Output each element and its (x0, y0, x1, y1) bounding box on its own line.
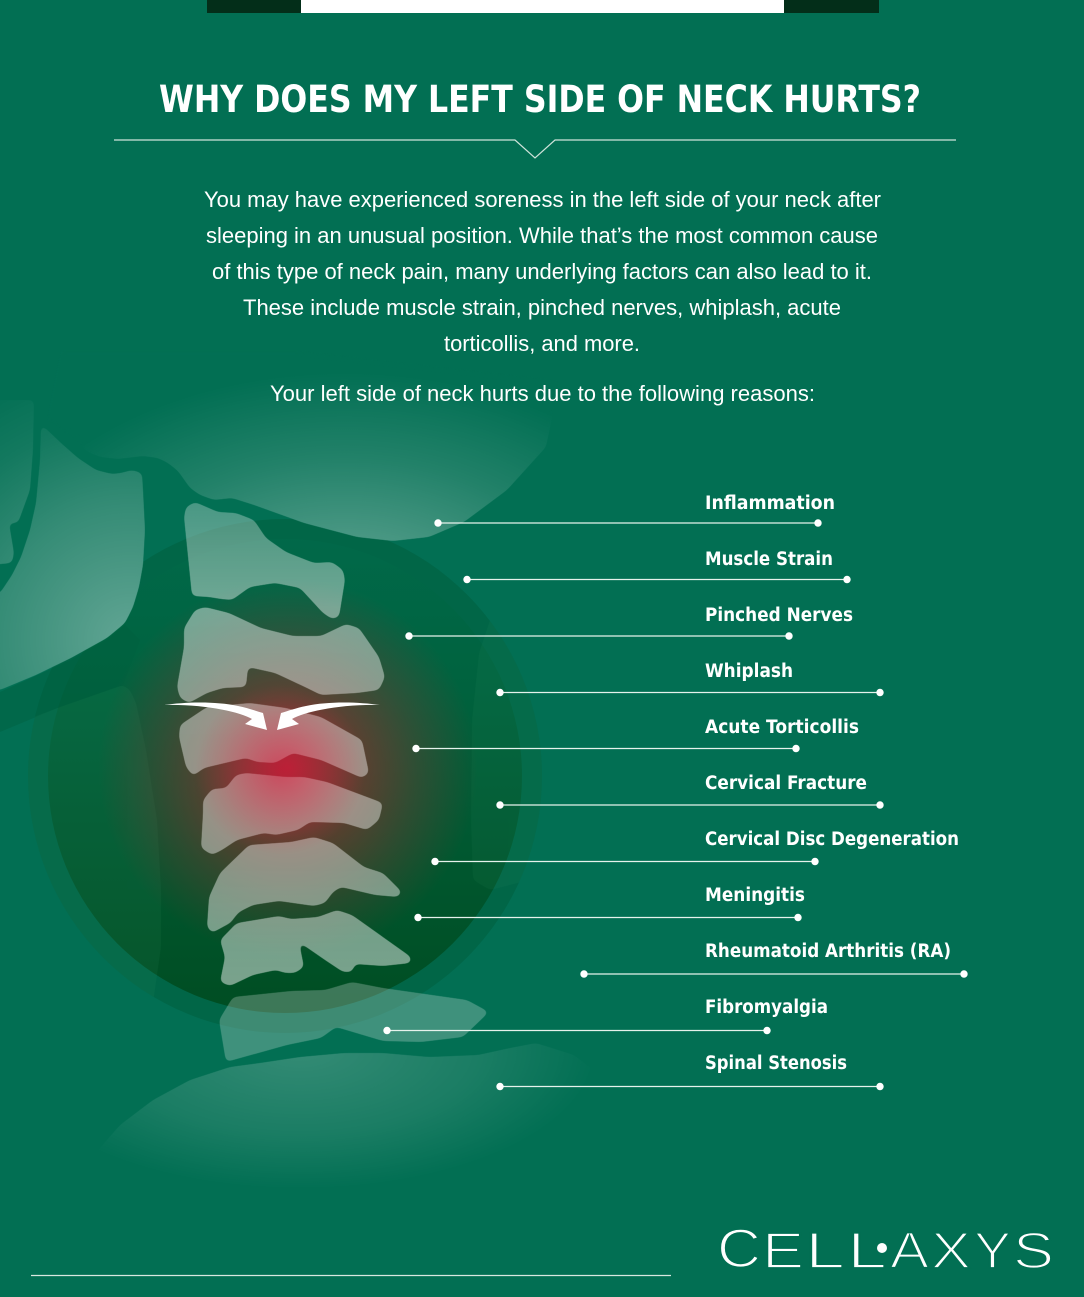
item: Spinal Stenosis: Spinal Stenosis (705, 1053, 847, 1074)
right neck muscle (471, 537, 560, 890)
vertebra C2 (177, 607, 385, 703)
right pain arrow (277, 702, 380, 730)
logo: CellAxys: S (1013, 1222, 1054, 1279)
item: Fibromyalgia: Fibromyalgia (705, 997, 828, 1018)
item: Cervical Disc Degeneration: Cervical Disc Degeneration (705, 829, 959, 850)
intro paragraph: of this type of neck pain, many underlying factors can also lead to it. (212, 259, 872, 284)
logo: CellAxys: E (762, 1222, 804, 1279)
item: Acute Torticollis (412, 717, 859, 752)
item: Cervical Fracture (496, 773, 884, 809)
head base (46, 350, 560, 541)
outer circle (28, 519, 542, 1033)
pain glow core (195, 685, 365, 855)
logo: CellAxys: X (931, 1222, 971, 1279)
intro paragraph: These include muscle strain, pinched nerves, whiplash, acute (243, 295, 841, 320)
reasons list (383, 493, 968, 1090)
footer rule (31, 1274, 671, 1276)
intro paragraph: You may have experienced soreness in the left side of your neck after (204, 187, 881, 212)
item: Meningitis: Meningitis (705, 885, 805, 906)
top banner bar (207, 0, 879, 13)
head (112, 395, 547, 541)
item: Cervical Disc Degeneration (431, 829, 959, 865)
item: Acute Torticollis: Acute Torticollis (705, 717, 859, 738)
logo: CellAxys: A (890, 1222, 929, 1279)
item: Meningitis (414, 885, 805, 921)
inner circle (48, 539, 522, 1013)
logo: CellAxys: Y (974, 1222, 1011, 1279)
vertebra C5 (207, 837, 402, 933)
neck shadow below jaw (0, 625, 140, 732)
pain glow (98, 578, 478, 958)
vertebra C3 (179, 703, 369, 778)
left neck muscle (0, 685, 161, 1090)
logo: CellAxys: L (847, 1222, 887, 1279)
shoulder (114, 1044, 556, 1170)
intro paragraph: torticollis, and more. (444, 331, 640, 356)
item: Fibromyalgia (383, 997, 828, 1034)
cervical vertebrae (177, 502, 411, 986)
item: Cervical Fracture: Cervical Fracture (705, 773, 867, 794)
logo: CellAxys: L (805, 1222, 845, 1279)
item: Whiplash (496, 661, 884, 696)
jaw base (0, 424, 145, 690)
title: WHY DOES MY LEFT SIDE OF NECK HURTS? (159, 78, 921, 121)
item: Pinched Nerves (405, 605, 853, 640)
item: Inflammation: Inflammation (705, 493, 835, 514)
item: Whiplash: Whiplash (705, 661, 793, 682)
title divider with notch (114, 140, 956, 158)
logo: CellAxys (717, 1217, 1054, 1279)
lead-in sentence: Your left side of neck hurts due to the following reasons: (270, 381, 815, 406)
item: Rheumatoid Arthritis (RA): Rheumatoid Arthritis (RA) (705, 941, 951, 962)
item: Inflammation (434, 493, 835, 527)
neck illustration (0, 395, 556, 1170)
vertebra C1 (184, 502, 345, 619)
item: Rheumatoid Arthritis (RA) (580, 941, 968, 978)
vertebra C6 (220, 910, 411, 986)
skull fragment (0, 400, 34, 565)
item: Muscle Strain: Muscle Strain (705, 549, 833, 570)
item: Spinal Stenosis (496, 1053, 884, 1090)
jaw (0, 424, 145, 690)
item: Muscle Strain (463, 549, 851, 583)
intro paragraph (204, 187, 881, 356)
vertebra C4 (201, 773, 383, 855)
intro paragraph: sleeping in an unusual position. While that’s the most common cause (206, 223, 878, 248)
left pain arrow (164, 702, 267, 730)
vertebra C7 (219, 982, 489, 1062)
logo: CellAxys: C (717, 1217, 761, 1279)
item: Pinched Nerves: Pinched Nerves (705, 605, 853, 626)
